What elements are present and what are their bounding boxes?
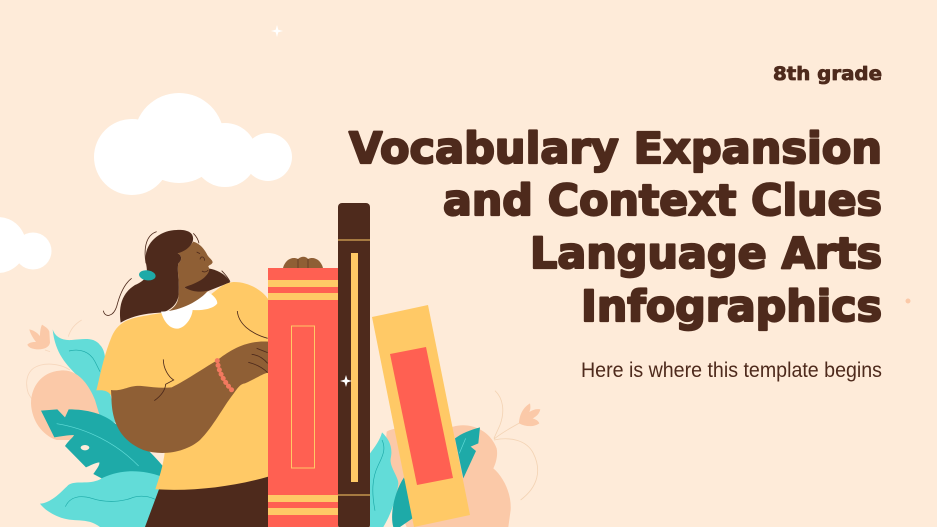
bracelet bbox=[217, 361, 233, 392]
collar bbox=[161, 292, 217, 329]
flower stems bbox=[27, 320, 82, 402]
book: red bbox=[268, 268, 338, 527]
teal leaf bbox=[41, 409, 163, 481]
icon: top sparkle bbox=[271, 25, 283, 37]
teal leaves bbox=[455, 427, 480, 478]
icon: left flower bbox=[27, 325, 50, 349]
fingers over the book bbox=[283, 257, 323, 268]
plants: left foliage bbox=[27, 320, 163, 527]
sleeve and hand lines bbox=[154, 311, 268, 401]
face and neck bbox=[163, 242, 213, 313]
stray hair strands bbox=[103, 232, 230, 315]
grade label: 8th grade bbox=[773, 63, 882, 85]
plants: right foliage bbox=[370, 391, 540, 527]
hair behind neck bbox=[184, 268, 230, 292]
peach blob bbox=[31, 370, 100, 440]
icon: small dot bbox=[906, 298, 910, 304]
title bbox=[349, 124, 882, 332]
title: Language Arts bbox=[530, 229, 882, 279]
facial features bbox=[197, 252, 208, 272]
title: Vocabulary Expansion bbox=[349, 124, 882, 174]
trousers bbox=[145, 473, 268, 527]
flower stems bbox=[494, 391, 538, 500]
hair tie bbox=[138, 269, 156, 281]
aqua leaf upper bbox=[53, 329, 117, 423]
book: dark spine bbox=[338, 203, 370, 527]
peach blob bbox=[383, 425, 511, 527]
subtitle: Here is where this template begins bbox=[581, 359, 882, 382]
aqua leaf bbox=[370, 432, 398, 527]
icon: small cloud bbox=[0, 217, 52, 273]
hair bbox=[120, 230, 193, 323]
aqua leaf lower bbox=[40, 471, 162, 527]
title: Infographics bbox=[581, 282, 882, 332]
icon: large cloud bbox=[94, 93, 292, 195]
icon: right flower bbox=[519, 403, 540, 426]
book: yellow leaning bbox=[372, 305, 470, 527]
shirt bbox=[96, 282, 268, 490]
title: and Context Clues bbox=[443, 176, 882, 226]
icon: sparkle on spine bbox=[340, 375, 352, 387]
arm bbox=[111, 341, 268, 453]
illustration: person bbox=[96, 230, 268, 527]
